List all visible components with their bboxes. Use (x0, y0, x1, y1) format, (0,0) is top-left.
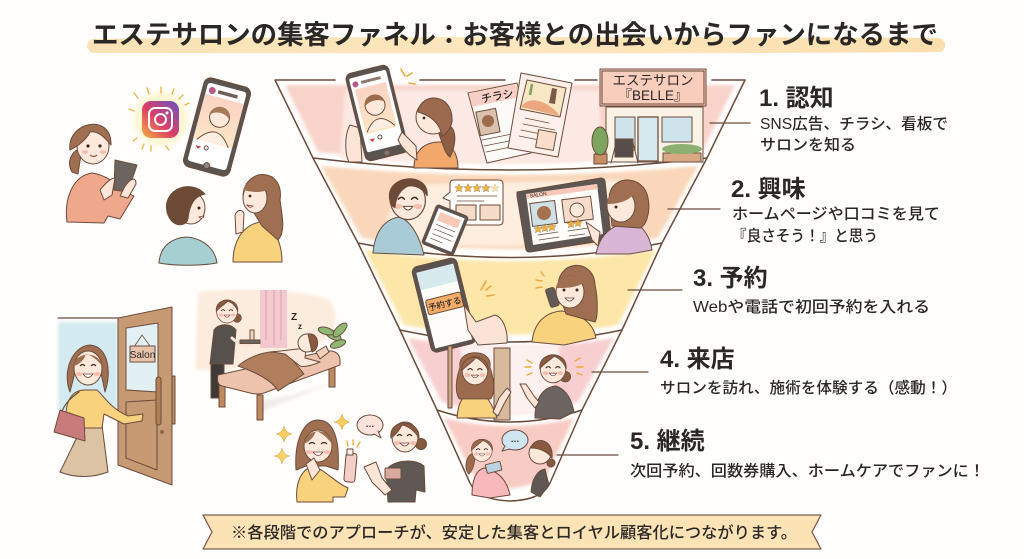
door frame (448, 346, 510, 420)
staff (520, 355, 574, 419)
guest (456, 353, 511, 418)
attention marks (481, 281, 494, 296)
step 4 label: サロンを訪れ、施術を体験する（感動！） (660, 379, 957, 397)
shoulder bag (54, 392, 85, 441)
illustration: massage room (195, 290, 349, 420)
section 5 scene: retention (466, 430, 555, 498)
woman with ponytail (398, 98, 458, 168)
step 1 label: SNS広告、チラシ、看板で (760, 115, 948, 133)
instagram phone (345, 64, 409, 162)
section 3 scene: reservation (411, 257, 597, 353)
step 3 label: 3. 予約 (693, 265, 768, 292)
flyer left: チラシ (480, 87, 515, 106)
flyer left (468, 83, 531, 163)
speech bubble: … (366, 419, 374, 429)
title: エステサロンの集客ファネル：お客様との出会いからファンになるまで (92, 20, 938, 50)
step 2 label: 2. 興味 (731, 176, 806, 203)
attention marks (525, 358, 583, 375)
flyer right (508, 73, 572, 157)
leader lines (557, 123, 750, 455)
door (118, 307, 175, 485)
product bottle (344, 449, 357, 482)
funnel outline (275, 80, 745, 501)
illustration: customer with product and staff (274, 414, 426, 502)
sleep mark: Z (291, 312, 297, 323)
section 4 scene: visit (448, 346, 583, 420)
staff (364, 422, 426, 502)
plant (317, 321, 349, 350)
step 2 label: ホームページや口コミを見て (732, 205, 940, 223)
woman on phone (532, 265, 597, 345)
potted plant (592, 127, 608, 164)
woman (54, 345, 143, 476)
illustration: woman entering salon (54, 307, 175, 485)
step 2 label (731, 176, 940, 245)
woman at tablet (586, 180, 652, 254)
step 3 label (693, 265, 930, 316)
step 1 label: サロンを知る (760, 136, 856, 154)
illustration: friends talking (159, 175, 283, 265)
funnel section fills (285, 85, 735, 488)
step 5 label: 次回予約、回数券購入、ホームケアでファンに！ (630, 462, 985, 480)
section 2 scene: interest (373, 178, 652, 256)
woman (233, 175, 283, 262)
boy (159, 187, 217, 265)
step 3 label: Webや電話で初回予約を入れる (693, 298, 930, 316)
section 1 scene: awareness (345, 64, 706, 168)
salon storefront: 『BELLE』 (618, 88, 688, 103)
bottom banner: ※各段階でのアプローチが、安定した集客とロイヤル顧客化につながります。 (231, 523, 797, 542)
review bubble (443, 180, 503, 225)
step 1 label: 1. 認知 (759, 85, 834, 112)
therapist (210, 300, 260, 398)
staff (529, 441, 555, 497)
hand holding phone (346, 125, 362, 162)
speech bubble: … (510, 434, 520, 444)
illustration: massage room: z (298, 322, 302, 331)
window view (58, 322, 118, 412)
illustration: woman with smartphone (66, 124, 137, 223)
attention marks (401, 69, 415, 84)
small tablet (421, 204, 469, 256)
curtain (260, 290, 287, 348)
tapping hand (464, 305, 507, 345)
salon sign: Salon (130, 350, 155, 361)
salon storefront: エステサロン (612, 73, 694, 88)
sparkles (274, 414, 350, 464)
funnel (275, 80, 750, 501)
room background (195, 290, 335, 370)
man (373, 179, 427, 255)
bottom banner (203, 515, 821, 549)
step 4 label: 4. 来店 (660, 346, 735, 373)
customer (466, 439, 510, 498)
step 5 label (630, 428, 985, 480)
attention marks (536, 272, 544, 288)
booking phone (411, 257, 477, 353)
step 5 label: 5. 継続 (630, 428, 705, 455)
step 4 label (660, 346, 957, 397)
booking phone: 予約する (427, 295, 462, 313)
customer (296, 420, 348, 502)
speech bubble (357, 415, 383, 438)
step 2 label: 『良さそう！』と思う (732, 227, 878, 245)
illustration: instagram phone (182, 76, 252, 178)
step 1 label (759, 85, 948, 154)
menu board (611, 139, 638, 163)
large tablet: SALON (530, 191, 548, 199)
salon sign (130, 335, 155, 362)
treatment bed (218, 334, 340, 420)
large tablet (517, 178, 611, 252)
salon storefront (600, 69, 706, 162)
attention marks (347, 440, 360, 447)
icon: instagram logo (129, 87, 192, 151)
